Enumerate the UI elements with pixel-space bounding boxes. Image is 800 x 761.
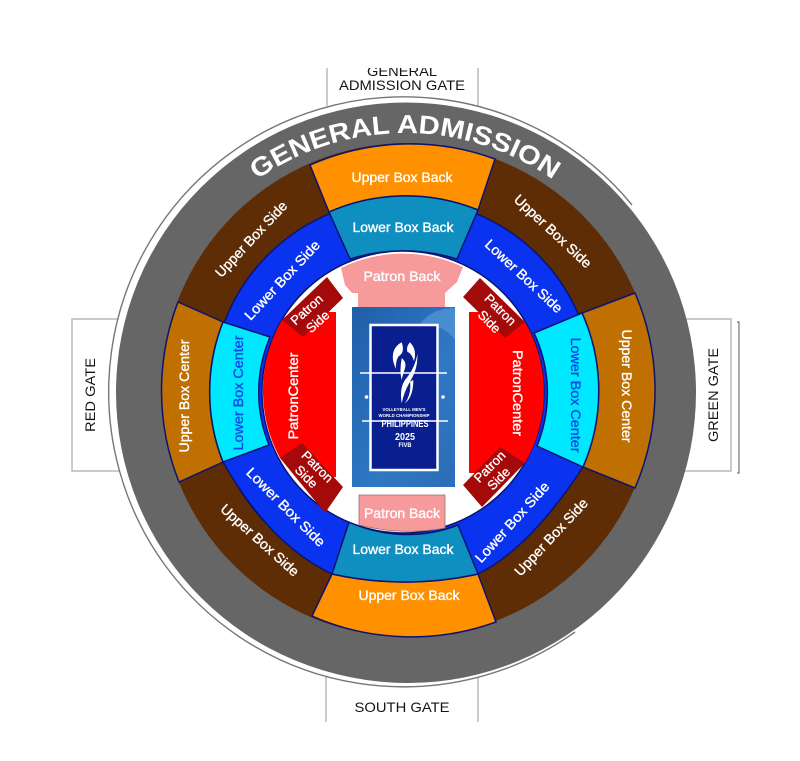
section labels: Patron Back — [364, 268, 442, 284]
tournament wordmark: 2025 — [395, 432, 415, 443]
gate: general admission — [326, 68, 479, 106]
upper box back north — [310, 144, 495, 212]
section labels: Lower Box Side — [241, 237, 323, 323]
upper box center west — [162, 302, 223, 482]
section labels: Lower Box Side — [482, 236, 566, 316]
patron side southeast — [463, 447, 525, 507]
section labels: Lower Box Center — [568, 338, 584, 453]
lower box side southeast fill — [458, 446, 583, 574]
section labels: Lower Box Back — [352, 219, 454, 235]
section labels: PatronCenter — [285, 352, 301, 440]
section labels: PatronCenter — [510, 350, 526, 436]
section labels — [176, 169, 635, 603]
section labels: Side — [303, 307, 332, 336]
section labels: Upper Box Side — [511, 495, 591, 579]
gate: green — [680, 319, 739, 473]
section labels: Upper Box Back — [352, 169, 453, 185]
gate: red — [72, 319, 125, 471]
patron side northwest — [282, 277, 343, 337]
volleyball court — [352, 307, 455, 487]
gate: red: RED GATE — [82, 358, 98, 432]
section labels: Lower Box Back — [352, 541, 454, 557]
patron side southwest — [280, 443, 343, 513]
lower box ring — [210, 196, 599, 582]
patron center west — [263, 312, 336, 477]
section labels: Lower Box Center — [230, 335, 246, 450]
section labels: Lower Box Side — [472, 478, 553, 566]
tournament wordmark: VOLLEYBALL MEN'S — [382, 407, 426, 412]
section labels: Upper Box Side — [511, 191, 595, 271]
section labels: Patron — [299, 448, 336, 485]
section labels: Upper Box Center — [619, 330, 635, 443]
section labels: Upper Box Center — [176, 339, 192, 452]
section labels: Side — [484, 464, 513, 493]
section labels: Lower Box Side — [243, 464, 329, 550]
section labels: Patron — [287, 291, 326, 328]
lower box center west — [210, 322, 270, 462]
gate: green: GREEN GATE — [705, 348, 721, 442]
upper box back south — [312, 574, 496, 637]
section labels: Upper Box Side — [217, 501, 303, 580]
tournament logo — [393, 342, 417, 403]
section labels: Patron — [471, 448, 508, 485]
gate: general admission: GENERAL — [367, 63, 437, 79]
lower box side southwest fill — [223, 445, 349, 574]
section labels: Side — [475, 307, 504, 336]
upper box center east — [582, 293, 655, 488]
gate: south — [326, 677, 478, 722]
patron side northeast — [463, 278, 525, 338]
section labels: Patron Back — [364, 505, 441, 521]
upper box ring — [161, 143, 655, 637]
section labels: Patron — [482, 291, 519, 328]
gate: south: SOUTH GATE — [354, 699, 450, 715]
section labels: Side — [292, 462, 321, 491]
patron center east — [469, 312, 544, 473]
lower box back south — [332, 522, 478, 582]
general admission heading: GENERAL ADMISSION — [251, 115, 562, 178]
section labels: Upper Box Back — [358, 587, 460, 603]
patron back south — [359, 495, 445, 531]
lower box center east — [534, 313, 599, 467]
gate: general admission: ADMISSION GATE — [339, 77, 465, 93]
patron back north — [341, 254, 463, 307]
tournament wordmark: PHILIPPINES — [382, 419, 429, 430]
lower box back north — [329, 196, 478, 259]
tournament wordmark: FIVB — [398, 443, 412, 449]
outer ring outline — [109, 97, 632, 687]
tournament wordmark — [378, 407, 430, 449]
section labels: Upper Box Side — [212, 198, 290, 280]
patron ring — [262, 251, 544, 533]
tournament wordmark: WORLD CHAMPIONSHIP — [378, 413, 430, 418]
lower box south outline — [223, 462, 583, 574]
stadium seating map — [71, 68, 740, 722]
